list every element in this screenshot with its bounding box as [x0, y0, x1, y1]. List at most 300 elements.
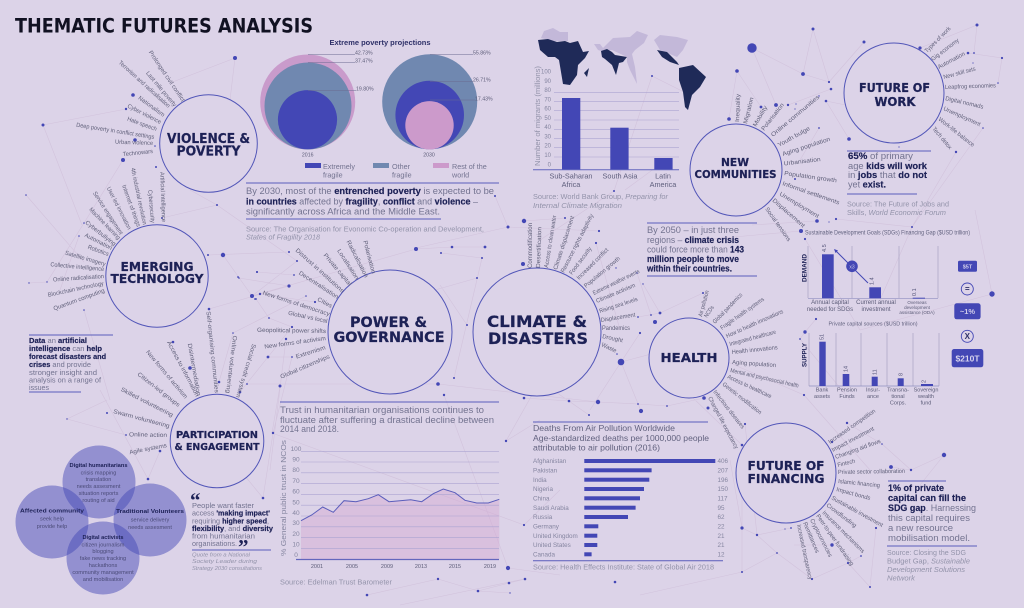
- panel: violence and poverty hub: Hate speech: [126, 117, 157, 133]
- panel: future of financing hub: Impact investment: [831, 426, 876, 454]
- chart: trust in NGOs line: [279, 402, 499, 586]
- text: entrenched poverty statement: States of Fragility 2018: [246, 234, 320, 242]
- panel: new communities hub: Aging population: [782, 137, 831, 158]
- chart: SDG financing gap demand: x3: [849, 264, 855, 270]
- chart: number of migrants: Source: World Bank Group, Preparing for: [533, 192, 669, 201]
- chart: SDG financing gap demand: development: [904, 305, 931, 310]
- panel: health hub: Health innovations: [732, 345, 778, 356]
- panel: health hub: Fragile health systems: [720, 297, 766, 332]
- chart: extreme poverty projections: 2030: [423, 152, 435, 158]
- panel: violence and poverty hub: VIOLENCE &: [167, 132, 250, 147]
- text: AI callout: [29, 335, 113, 392]
- panel: emerging technology hub: Robotics: [87, 245, 109, 258]
- panel: future of financing hub: Peer-to-peer fundraising: [814, 514, 854, 567]
- title: THEMATIC FUTURES ANALYSIS: [15, 14, 313, 38]
- panel: future of work hub: [844, 25, 996, 151]
- panel: power and governance hub: Radicalisation: [345, 240, 369, 279]
- diagram: community venn: community management: [72, 570, 134, 576]
- chart: trust in NGOs line: 2005: [346, 564, 358, 570]
- chart: trust in NGOs line: 50: [292, 500, 300, 506]
- chart: private capital supply: assets: [814, 394, 830, 400]
- chart: number of migrants: Latin: [655, 172, 671, 180]
- text: quote: from humanitarian: [192, 532, 255, 540]
- callout: financing equation: $5T: [963, 264, 973, 270]
- panel: new communities hub: Social tensions: [763, 207, 791, 243]
- panel: climate and disasters hub: Displacement: [600, 313, 636, 324]
- chart: number of migrants: South Asia: [603, 172, 638, 180]
- panel: new communities hub: Polarisation: [761, 103, 786, 132]
- text: private capital statement: Budget Gap, Sustainable: [887, 558, 970, 566]
- panel: climate and disasters hub: Population growth: [583, 256, 622, 290]
- chart: number of migrants: 100: [541, 70, 552, 76]
- panel: power and governance hub: POWER &: [350, 315, 427, 331]
- panel: participation and engagement hub: Disintermediation: [186, 343, 201, 396]
- text: quote: ”: [238, 535, 248, 559]
- diagram: community venn: Affected community: [20, 508, 85, 514]
- panel: future of financing hub: Increased transparency: [795, 524, 813, 580]
- panel: future of financing hub: Private sector collaboration: [838, 469, 905, 476]
- chart: deaths from air pollution: 21: [718, 533, 725, 540]
- panel: health hub: Access to healthcare: [726, 374, 773, 400]
- panel: future of financing hub: Impact bonds: [835, 487, 871, 502]
- chart: extreme poverty projections: [260, 38, 493, 180]
- chart: trust in NGOs line: 2013: [415, 564, 427, 570]
- panel: participation and engagement hub: & ENGAGEMENT: [174, 442, 260, 453]
- chart: number of migrants: 90: [544, 79, 552, 85]
- panel: emerging technology hub: Satellite imagery: [64, 251, 106, 268]
- diagram: community venn: routing of aid: [82, 498, 115, 504]
- chart: number of migrants: Africa: [562, 180, 581, 189]
- panel: power and governance hub: Private capital: [322, 253, 352, 287]
- chart: SDG financing gap demand: Sustainable Development Goals (SDGs) Financing Gap ($USD trillion): [805, 230, 970, 236]
- legend: fragile: [392, 170, 412, 180]
- text: AI callout: crises and provide: [29, 360, 91, 369]
- callout: financing equation: X: [965, 332, 971, 341]
- panel: violence and poverty hub: Terrorism and radicalisation: [117, 60, 171, 109]
- chart: number of migrants: 30: [544, 134, 552, 140]
- chart: deaths from air pollution: China: [533, 496, 550, 502]
- text: entrenched poverty statement: in countries affected by fragility, conflict and violence –: [246, 196, 478, 206]
- callout: financing equation: [952, 261, 983, 367]
- chart: trust in NGOs line: 2015: [449, 564, 461, 570]
- chart: deaths from air pollution: attributable to air pollution (2016): [533, 442, 660, 452]
- panel: new communities hub: Unemployment: [778, 192, 820, 220]
- text: AI callout: forecast disasters and: [29, 352, 106, 361]
- chart: private capital supply: fund: [921, 400, 931, 406]
- panel: violence and poverty hub: Last mile poverty: [144, 71, 177, 108]
- panel: emerging technology hub: Collective intelligence: [50, 262, 105, 273]
- chart: deaths from air pollution: 22: [718, 524, 725, 530]
- panel: violence and poverty hub: Technowars: [123, 149, 153, 158]
- panel: future of financing hub: Cryptocurrencies: [808, 518, 833, 558]
- panel: power and governance hub: Extremism: [295, 345, 327, 360]
- legend: Rest of the: [452, 162, 487, 171]
- chart: deaths from air pollution: Saudi Arabia: [533, 505, 569, 512]
- panel: health hub: Global pandemics: [712, 292, 744, 325]
- panel: new communities hub: Displacement: [771, 198, 806, 230]
- diagram: community venn: needs assesment: [128, 525, 172, 531]
- text: climate crisis statement: [646, 223, 757, 276]
- panel: power and governance hub: [257, 240, 452, 394]
- legend: world: [451, 170, 469, 180]
- chart: extreme poverty projections: 2016: [302, 152, 314, 158]
- panel: climate and disasters hub: [473, 213, 641, 396]
- panel: participation and engagement hub: Citizen-led groups: [136, 372, 180, 409]
- chart: SDG financing gap demand: 1.4: [870, 277, 876, 285]
- panel: emerging technology hub: Artificial Intelligence: [158, 172, 166, 223]
- text: future of work statement: 65% of primary: [848, 151, 914, 161]
- panel: future of work hub: Work-life balance: [937, 117, 976, 149]
- panel: violence and poverty hub: Deep poverty in conflict settings: [76, 123, 155, 141]
- chart: SDG financing gap demand: [802, 230, 970, 315]
- panel: climate and disasters hub: Climate activism: [595, 283, 636, 305]
- text: future of work statement: in jobs that do not: [848, 170, 927, 180]
- chart: deaths from air pollution: 406: [718, 458, 729, 465]
- text: private capital statement: [887, 481, 977, 582]
- chart: private capital supply: Transna-: [887, 388, 909, 394]
- legend: Other: [392, 162, 411, 171]
- panel: climate and disasters hub: CLIMATE &: [487, 312, 587, 331]
- chart: deaths from air pollution: 12: [718, 552, 725, 558]
- text: quote: access 'making impact': [192, 508, 270, 518]
- panel: future of work hub: Tech detox: [930, 126, 952, 151]
- panel: health hub: Mental and psychosocial health: [730, 368, 799, 390]
- chart: deaths from air pollution: Afghanistan: [533, 458, 567, 465]
- panel: future of work hub: Leapfrog economies: [945, 83, 996, 91]
- text: entrenched poverty statement: [246, 183, 499, 242]
- panel: participation and engagement hub: Self-organising communities: [204, 311, 219, 393]
- panel: new communities hub: [690, 94, 840, 243]
- panel: climate and disasters hub: Food security: [569, 246, 593, 276]
- panel: emerging technology hub: Online radicalisation: [53, 274, 104, 284]
- panel: climate and disasters hub: Pandemics: [602, 326, 630, 332]
- panel: future of work hub: Digital nomads: [945, 96, 984, 111]
- chart: extreme poverty projections: 55.86%: [473, 50, 491, 56]
- chart: extreme poverty projections: 26.71%: [473, 78, 491, 84]
- diagram: community venn: Digital humanitarians: [70, 463, 128, 469]
- chart: private capital supply: 8: [898, 373, 904, 376]
- panel: future of work hub: New skill sets: [943, 67, 976, 81]
- text: private capital statement: Development Solutions: [887, 567, 966, 574]
- panel: power and governance hub: Cities: [316, 297, 333, 310]
- text: quote: Strategy 2030 consultations: [192, 566, 262, 572]
- panel: future of financing hub: Remittances: [801, 521, 820, 554]
- text: future of work statement: Source: The Future of Jobs and: [847, 202, 949, 208]
- chart: deaths from air pollution: Canada: [533, 552, 556, 558]
- chart: deaths from air pollution: 150: [718, 486, 729, 493]
- legend: fragile: [323, 170, 343, 180]
- panel: health hub: How to health innovations: [725, 309, 784, 340]
- chart: deaths from air pollution: Pakistan: [533, 468, 558, 474]
- text: quote: [190, 488, 274, 572]
- chart: private capital supply: [802, 322, 939, 406]
- text: private capital statement: this capital requires: [888, 513, 970, 524]
- panel: power and governance hub: Global citizenships: [280, 354, 331, 381]
- panel: new communities hub: Online communities: [770, 95, 821, 139]
- chart: number of migrants: 70: [544, 98, 552, 104]
- text: AI callout: intelligence can help: [29, 344, 102, 353]
- panel: climate and disasters hub: Resource rights adaptivity: [560, 213, 595, 274]
- chart: deaths from air pollution: Deaths From Air Pollution Worldwide: [533, 423, 675, 433]
- panel: power and governance hub: Localisation: [335, 248, 359, 281]
- panel: participation and engagement hub: Access to information: [165, 340, 200, 398]
- chart: private capital supply: ance: [867, 394, 879, 400]
- chart: deaths from air pollution: 207: [718, 468, 729, 474]
- chart: number of migrants: [533, 66, 679, 210]
- panel: power and governance hub: New forms of democracy: [262, 291, 330, 318]
- panel: new communities hub: Youth bulge: [777, 126, 812, 149]
- chart: extreme poverty projections: 19.80%: [356, 86, 374, 92]
- text: climate crisis statement: By 2050 – in just three: [647, 225, 739, 235]
- panel: power and governance hub: Global vs local: [287, 311, 328, 325]
- panel: power and governance hub: Geopolitical power shifts: [257, 328, 326, 335]
- panel: new communities hub: Population growth: [784, 171, 837, 184]
- chart: SDG financing gap demand: needed for SDGs: [807, 307, 853, 313]
- chart: number of migrants: 10: [544, 153, 552, 159]
- panel: emerging technology hub: Service engagement: [91, 191, 124, 236]
- panel: new communities hub: Mobility: [753, 105, 769, 128]
- chart: SDG financing gap demand: investment: [861, 307, 891, 313]
- chart: number of migrants: 20: [544, 144, 552, 150]
- text: private capital statement: capital can fill the: [888, 493, 966, 504]
- panel: climate and disasters hub: Drought: [602, 334, 624, 344]
- chart: extreme poverty projections: Extreme poverty projections: [330, 38, 430, 47]
- text: AI callout: stronger insight and: [29, 368, 97, 377]
- chart: number of migrants: 50: [544, 116, 552, 122]
- panel: new communities hub: Inequality: [735, 94, 742, 122]
- text: entrenched poverty statement: Source: The Organisation for Evonomic Co-operation and Development,: [246, 226, 484, 234]
- chart: number of migrants: America: [650, 180, 677, 189]
- chart: private capital supply: 11: [872, 369, 878, 375]
- text: future of work statement: Skills, World Economic Forum: [847, 210, 946, 217]
- chart: extreme poverty projections: 17.43%: [475, 96, 493, 102]
- text: entrenched poverty statement: By 2030, most of the entrenched poverty is expected to be: [246, 186, 494, 196]
- chart: trust in NGOs line: 40: [292, 510, 300, 517]
- chart: private capital supply: Insur-: [866, 388, 880, 394]
- diagram: community venn: translation: [86, 477, 111, 483]
- map: climate migration regions: [538, 28, 706, 110]
- chart: trust in NGOs line: Source: Edelman Trust Barometer: [280, 578, 392, 586]
- chart: trust in NGOs line: 2019: [484, 564, 496, 570]
- panel: future of financing hub: Increased competition: [828, 409, 877, 446]
- panel: climate and disasters hub: Rising sea levels: [599, 297, 639, 315]
- panel: health hub: Genetic modification: [721, 382, 762, 416]
- chart: trust in NGOs line: 20: [292, 531, 300, 538]
- callout: financing equation: =: [965, 284, 970, 294]
- diagram: community venn: needs assesment: [77, 484, 121, 490]
- chart: SDG financing gap demand: assistance (ODA): [899, 310, 935, 315]
- text: AI callout: Data an artificial: [29, 336, 87, 345]
- diagram: community venn: citizen journalism: [82, 542, 125, 548]
- chart: deaths from air pollution: Source: Health Effects Institute: State of Global Air 2018: [533, 562, 714, 572]
- chart: extreme poverty projections: 37.47%: [355, 58, 373, 64]
- chart: private capital supply: 51: [820, 334, 826, 340]
- chart: deaths from air pollution: 21: [718, 542, 725, 549]
- text: private capital statement: Source: Closing the SDG: [887, 550, 966, 557]
- text: AI callout: analysis on a range of: [29, 376, 102, 384]
- text: private capital statement: mobilisation model.: [888, 533, 970, 544]
- text: climate crisis statement: regions – climate crisis: [647, 235, 739, 245]
- chart: trust in NGOs line: 2014 and 2018.: [280, 424, 339, 434]
- diagram: community venn: and mobilisation: [83, 577, 123, 583]
- text: quote: requiring higher speed,: [192, 516, 269, 526]
- panel: emerging technology hub: [47, 167, 208, 327]
- chart: private capital supply: 14: [844, 366, 850, 372]
- panel: emerging technology hub: Cyberbullying: [84, 220, 116, 248]
- text: quote: organisations.: [192, 539, 237, 548]
- panel: emerging technology hub: EMERGING: [120, 259, 194, 274]
- panel: climate and disasters hub: Climate displacement: [553, 215, 576, 271]
- chart: SDG financing gap demand: 0.1: [912, 288, 918, 296]
- panel: future of financing hub: Sustainable investment: [830, 496, 884, 529]
- panel: participation and engagement hub: PARTICIPATION: [176, 430, 258, 441]
- panel: future of work hub: Unemployment: [942, 106, 981, 128]
- text: quote: People want faster: [192, 501, 254, 510]
- diagram: community venn: seek help: [40, 516, 64, 522]
- panel: future of financing hub: FUTURE OF: [748, 458, 824, 473]
- chart: trust in NGOs line: 0: [294, 552, 298, 559]
- chart: number of migrants: 40: [544, 125, 552, 131]
- chart: private capital supply: SUPPLY: [802, 342, 808, 367]
- chart: trust in NGOs line: fluctuate after suffering a drastical decline between: [280, 415, 494, 425]
- text: quote: Quote from a National: [192, 552, 251, 558]
- panel: climate and disasters hub: Access to clean water: [544, 215, 558, 268]
- panel: health hub: Air pollution: [698, 290, 711, 318]
- panel: health hub: Infectious diseases: [711, 390, 745, 430]
- chart: SDG financing gap demand: Overseas: [907, 300, 927, 305]
- panel: future of work hub: Types of work: [924, 25, 953, 54]
- chart: deaths from air pollution: 196: [718, 477, 729, 484]
- panel: climate and disasters hub: Waste: [600, 342, 618, 355]
- chart: private capital supply: Bank: [816, 388, 829, 394]
- chart: private capital supply: Sovereign: [914, 388, 938, 394]
- chart: private capital supply: Pension: [837, 388, 857, 394]
- chart: number of migrants: 80: [544, 88, 552, 94]
- panel: new communities hub: COMMUNITIES: [694, 169, 776, 181]
- panel: new communities hub: Informal settlements: [781, 181, 840, 206]
- panel: participation and engagement hub: Swarm volunteering: [112, 409, 170, 430]
- panel: new communities hub: Urbanisation: [784, 157, 821, 167]
- panel: health hub: Integrated healthcare: [729, 330, 777, 348]
- panel: health hub: Aging population: [732, 360, 776, 369]
- text: climate crisis statement: within their countries.: [646, 264, 732, 274]
- chart: trust in NGOs line: 30: [292, 520, 300, 527]
- chart: number of migrants: Sub-Saharan: [549, 172, 593, 180]
- panel: emerging technology hub: Blockchain technology: [47, 281, 104, 299]
- diagram: community venn: blogging: [92, 549, 114, 555]
- chart: deaths from air pollution: 117: [718, 496, 728, 502]
- panel: future of financing hub: Changing aid flows: [835, 439, 882, 461]
- panel: climate and disasters hub: Desertification: [536, 227, 543, 268]
- panel: violence and poverty hub: Prolonged civil conflict: [147, 50, 185, 103]
- chart: SDG financing gap demand: DEMAND: [802, 254, 808, 282]
- text: private capital statement: Network: [887, 576, 916, 582]
- chart: trust in NGOs line: Trust in humanitarian organisations continues to: [280, 405, 484, 415]
- panel: participation and engagement hub: New forms of activism: [144, 350, 188, 400]
- panel: emerging technology hub: TECHNOLOGY: [110, 271, 204, 286]
- text: future of work statement: age kids will work: [848, 161, 928, 171]
- panel: violence and poverty hub: POVERTY: [176, 144, 241, 160]
- chart: private capital supply: Funds: [839, 394, 855, 400]
- panel: participation and engagement hub: Online action: [129, 432, 167, 439]
- panel: emerging technology hub: Machine learning: [87, 207, 121, 241]
- panel: health hub: [649, 290, 799, 450]
- chart: number of migrants: 0: [548, 162, 552, 168]
- text: private capital statement: a new resource: [888, 523, 953, 534]
- chart: trust in NGOs line: 100: [291, 446, 302, 453]
- panel: new communities hub: NEW: [721, 157, 749, 169]
- panel: future of financing hub: Islamic financing: [838, 479, 880, 489]
- chart: private capital supply: 2: [922, 380, 928, 383]
- text: quote: Society Leader during: [192, 559, 258, 565]
- diagram: community venn: [16, 446, 186, 594]
- diagram: community venn: hackathons: [89, 563, 118, 569]
- panel: health hub: NCDs: [704, 305, 716, 319]
- diagram: community venn: fake news tracking: [80, 556, 126, 562]
- chart: deaths from air pollution: Nigeria: [533, 486, 553, 493]
- panel: participation and engagement hub: [112, 311, 264, 488]
- chart: number of migrants: Internal Climate Migration: [533, 201, 622, 210]
- panel: participation and engagement hub: Skilled volunteering: [119, 387, 174, 419]
- panel: violence and poverty hub: Cyber violence: [126, 104, 162, 126]
- diagram: community venn: Traditional Volunteers: [116, 509, 184, 515]
- chart: trust in NGOs line: 80: [292, 467, 300, 474]
- chart: SDG financing gap demand: Annual capital: [811, 300, 849, 306]
- chart: deaths from air pollution: United States: [533, 542, 571, 549]
- chart: deaths from air pollution: Germany: [533, 524, 560, 530]
- chart: trust in NGOs line: 2009: [381, 564, 393, 570]
- panel: violence and poverty hub: Urban violence: [115, 140, 154, 147]
- panel: power and governance hub: Polarisation: [361, 240, 376, 275]
- panel: emerging technology hub: Internet of things: [120, 184, 141, 228]
- text: future of work statement: [847, 151, 949, 217]
- panel: emerging technology hub: 4th industrial revolution: [129, 167, 147, 225]
- chart: number of migrants: 60: [544, 106, 552, 112]
- panel: climate and disasters hub: Increased conflict: [576, 247, 610, 281]
- text: private capital statement: SDG gap. Harnessing: [888, 503, 976, 514]
- chart: number of migrants: Number of migrants (millions): [535, 66, 542, 166]
- legend: [305, 162, 487, 180]
- panel: participation and engagement hub: Social credit system: [234, 343, 256, 398]
- text: quote: flexibility, and diversity: [192, 524, 274, 533]
- callout: financing equation: ~1%: [960, 307, 975, 316]
- panel: climate and disasters hub: Extreme weather events: [592, 269, 641, 297]
- chart: trust in NGOs line: 90: [292, 456, 300, 464]
- panel: power and governance hub: New forms of activism: [264, 336, 326, 351]
- panel: new communities hub: Migration: [743, 97, 755, 124]
- panel: future of work hub: WORK: [874, 95, 916, 109]
- chart: trust in NGOs line: 60: [292, 488, 300, 496]
- text: climate crisis statement: million people to move: [647, 254, 739, 264]
- panel: climate and disasters hub: DISASTERS: [488, 329, 588, 348]
- text: entrenched poverty statement: significantly across Africa and the Middle East.: [246, 206, 440, 216]
- chart: trust in NGOs line: 2001: [311, 564, 323, 570]
- panel: participation and engagement hub: Agile systems: [129, 443, 167, 456]
- panel: future of work hub: Automation: [937, 51, 966, 71]
- text: future of work statement: yet exist.: [848, 180, 886, 190]
- panel: power and governance hub: Decentralisation: [297, 271, 339, 301]
- panel: health hub: Changed life expectancy: [706, 396, 739, 450]
- chart: SDG financing gap demand: Current annual: [856, 300, 896, 306]
- chart: SDG financing gap demand: 4.5: [822, 244, 828, 252]
- chart: private capital supply: Private capital sources ($USD trillion): [828, 322, 918, 328]
- panel: violence and poverty hub: [76, 50, 257, 192]
- chart: private capital supply: wealth: [917, 394, 934, 400]
- chart: deaths from air pollution: [533, 422, 729, 572]
- legend: Extremely: [323, 162, 355, 171]
- chart: extreme poverty projections: 42.73%: [355, 50, 373, 56]
- chart: trust in NGOs line: % General public trust in NCOs: [279, 440, 288, 556]
